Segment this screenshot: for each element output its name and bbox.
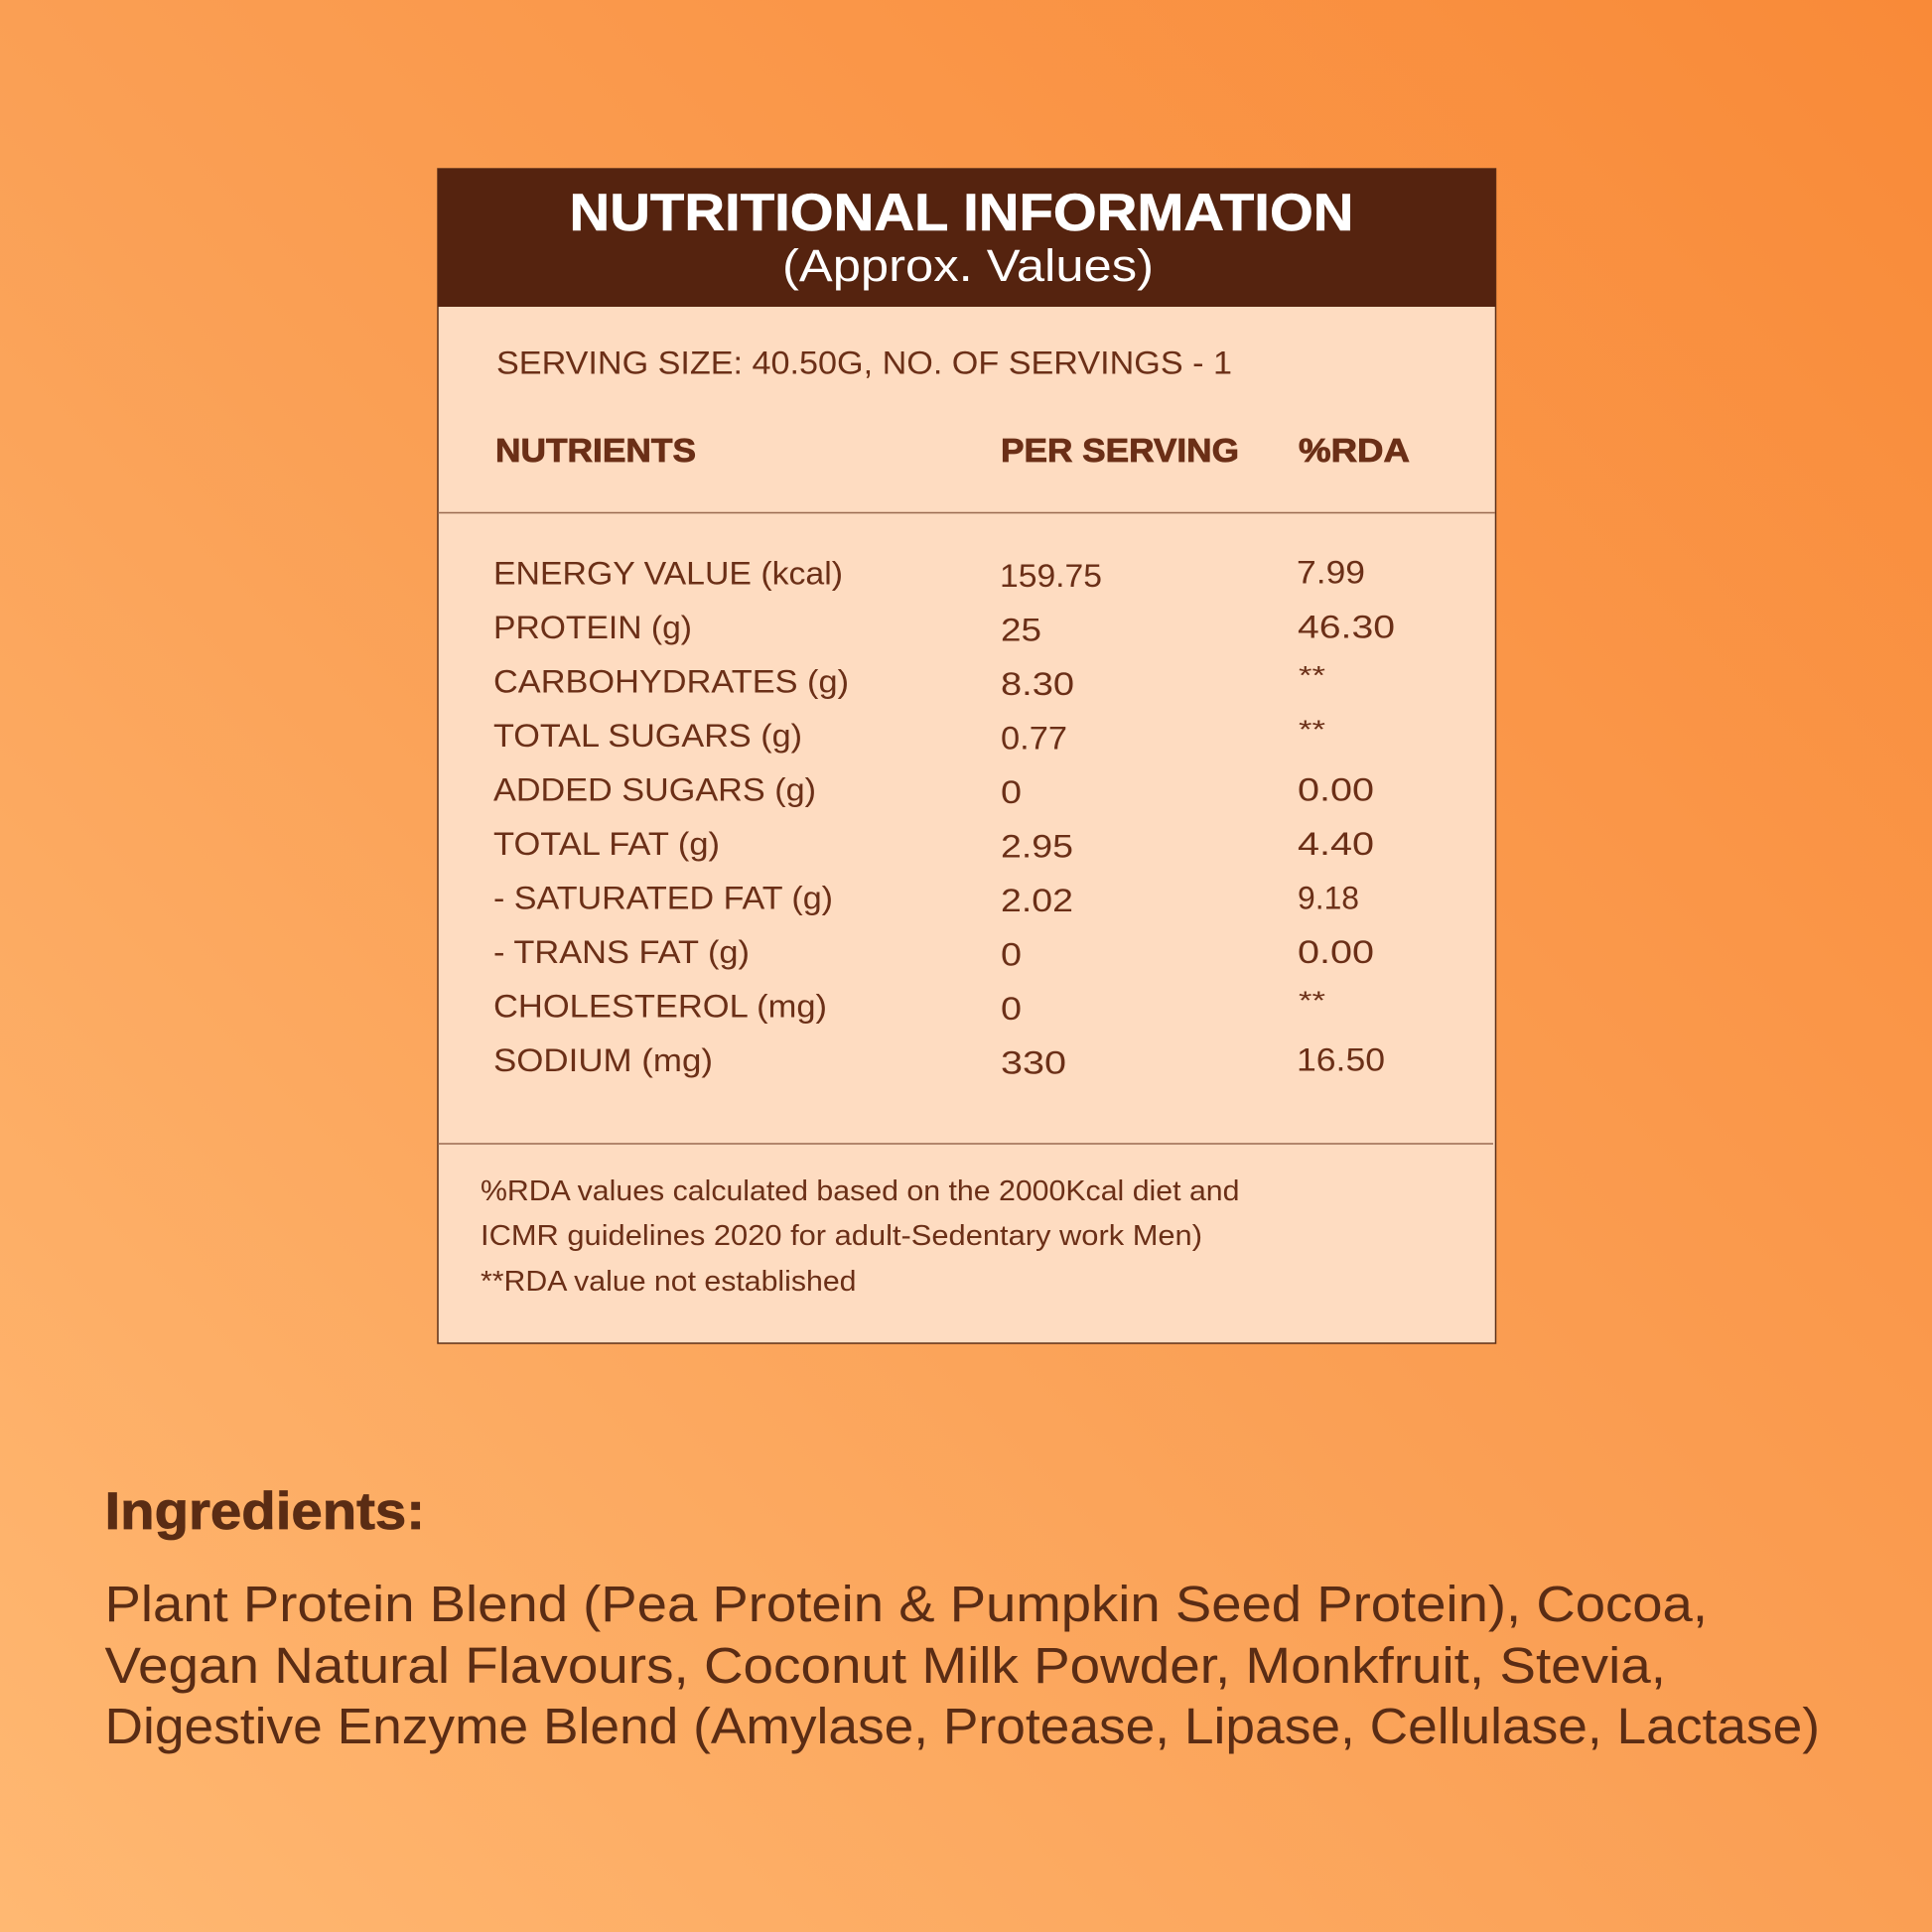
ingredients list: Digestive Enzyme Blend (Amylase, Protease, Lipase, Cellulase, Lactase) [105, 1698, 1820, 1754]
per serving values: 0 [1001, 991, 1022, 1027]
column headings: NUTRIENTS [495, 432, 696, 469]
RDA values: 0.00 [1298, 934, 1374, 970]
footnotes: ICMR guidelines 2020 for adult-Sedentary work Men) [481, 1220, 1202, 1252]
ingredients list: Vegan Natural Flavours, Coconut Milk Powder, Monkfruit, Stevia, [105, 1637, 1666, 1694]
footnotes: %RDA values calculated based on the 2000Kcal diet and [481, 1175, 1239, 1207]
nutrient names: SODIUM (mg) [493, 1042, 713, 1078]
RDA values: ** [1299, 660, 1325, 690]
per serving values: 8.30 [1001, 666, 1074, 702]
RDA values: ** [1299, 985, 1325, 1015]
ingredients section [105, 1482, 1820, 1754]
nutrient names: TOTAL SUGARS (g) [493, 718, 802, 754]
RDA values: 46.30 [1298, 610, 1395, 645]
ingredients list [105, 1576, 1820, 1754]
column headings: %RDA [1299, 432, 1410, 469]
per serving values: 0 [1001, 936, 1022, 972]
RDA values: 16.50 [1297, 1042, 1385, 1078]
panel: nutrition table [438, 169, 1495, 1343]
per serving values: 25 [1001, 612, 1041, 647]
nutrient names: PROTEIN (g) [493, 610, 692, 645]
per serving values: 330 [1001, 1044, 1066, 1080]
column headings: PER SERVING [1001, 432, 1239, 469]
per serving values: 159.75 [1000, 558, 1102, 594]
RDA values: 7.99 [1297, 554, 1365, 590]
per serving values: 2.95 [1001, 828, 1073, 864]
RDA values: 0.00 [1298, 772, 1374, 808]
per serving values: 0 [1001, 774, 1022, 810]
panel body [438, 169, 1495, 1343]
RDA values: 9.18 [1298, 880, 1359, 915]
per serving values [1000, 558, 1102, 1080]
RDA values: ** [1299, 715, 1325, 745]
header band [438, 169, 1495, 307]
serving size: SERVING SIZE: 40.50G, NO. OF SERVINGS - 1 [496, 345, 1232, 381]
nutrient names: CHOLESTEROL (mg) [493, 988, 827, 1024]
RDA values [1297, 554, 1395, 1078]
nutrient names: - SATURATED FAT (g) [493, 880, 833, 915]
per serving values: 2.02 [1001, 883, 1073, 918]
per serving values: 0.77 [1001, 720, 1067, 756]
nutrient names [493, 555, 849, 1078]
title: NUTRITIONAL INFORMATION [570, 184, 1354, 242]
column headings [495, 432, 1410, 469]
nutrient names: - TRANS FAT (g) [493, 934, 750, 970]
RDA values: 4.40 [1298, 826, 1374, 862]
footnotes [481, 1175, 1239, 1298]
nutrient names: ENERGY VALUE (kcal) [493, 555, 843, 591]
footnotes: **RDA value not established [481, 1266, 856, 1298]
ingredients list: Plant Protein Blend (Pea Protein & Pumpkin Seed Protein), Cocoa, [105, 1576, 1708, 1632]
nutrient names: TOTAL FAT (g) [493, 826, 720, 862]
subtitle: (Approx. Values) [782, 240, 1154, 291]
nutrient names: CARBOHYDRATES (g) [493, 663, 849, 699]
nutrient names: ADDED SUGARS (g) [493, 771, 816, 807]
ingredients heading: Ingredients: [105, 1482, 425, 1541]
